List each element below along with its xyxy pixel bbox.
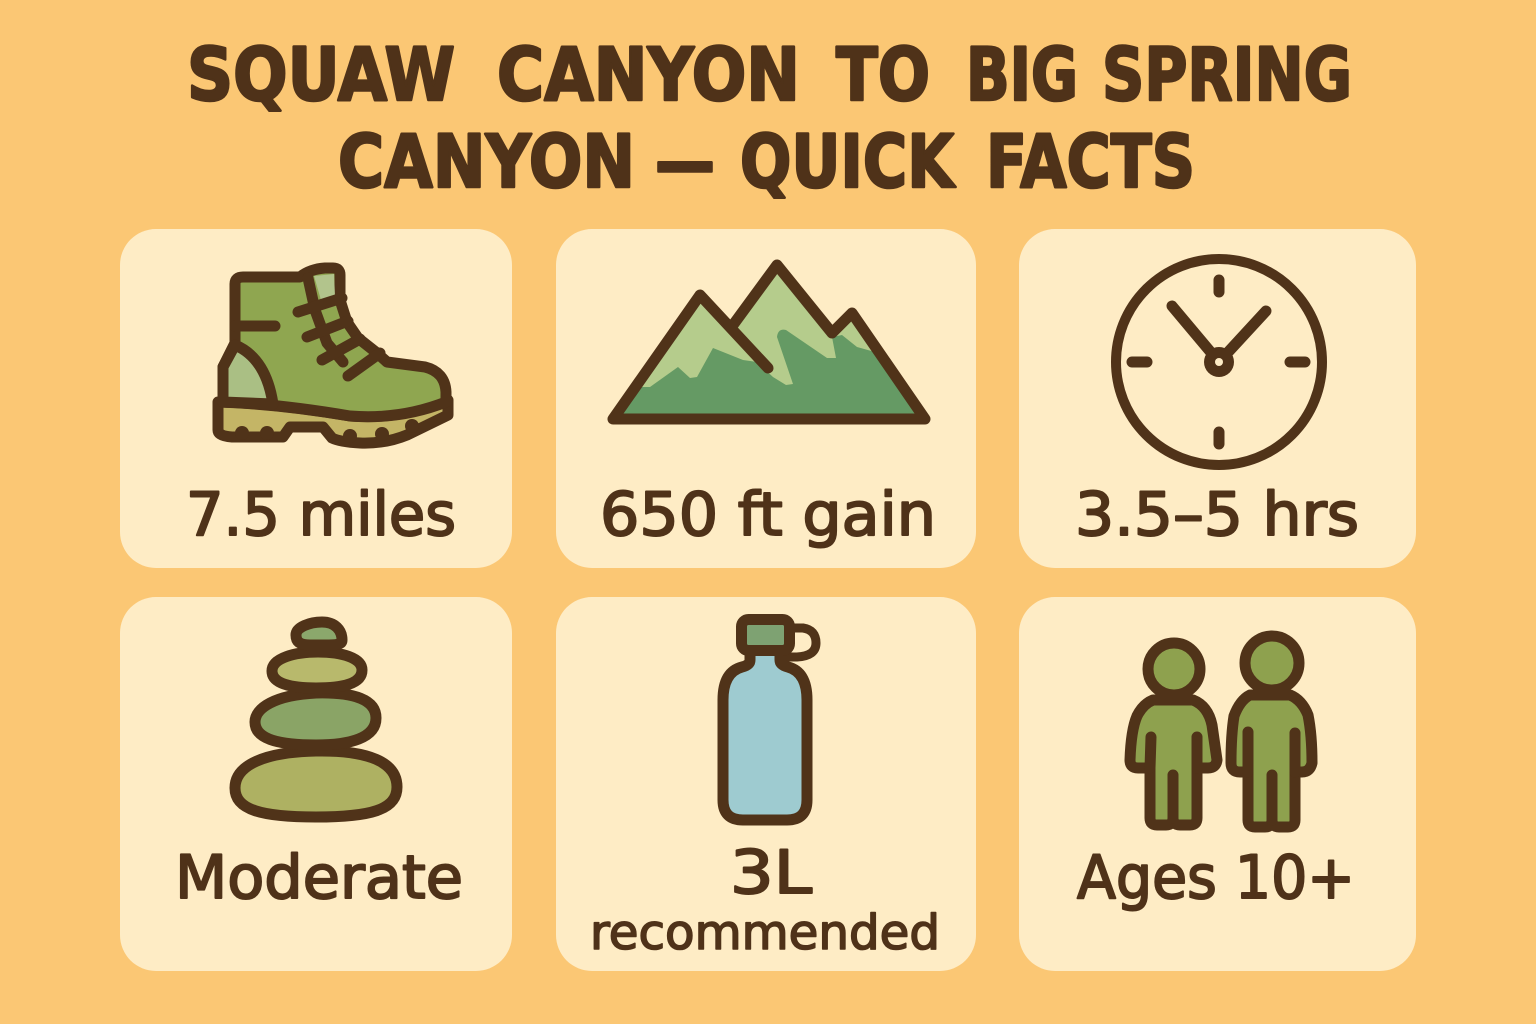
panel: distance xyxy=(120,229,512,568)
icon: two people xyxy=(1130,636,1312,827)
panel: duration xyxy=(1019,229,1416,568)
panel: ages xyxy=(1019,597,1416,971)
label: 7.5 miles: 7.5 miles xyxy=(186,480,456,550)
label: Moderate: Moderate xyxy=(175,843,463,913)
panel: difficulty xyxy=(120,597,512,971)
title: QUICK xyxy=(740,120,956,205)
title: TO xyxy=(836,33,930,118)
label: Ages 10+: Ages 10+ xyxy=(1077,843,1355,913)
icon: hiking boot xyxy=(218,268,448,443)
title: FACTS xyxy=(986,120,1195,205)
title: CANYON xyxy=(497,33,800,118)
title xyxy=(187,33,1352,205)
icon: rock cairn xyxy=(235,622,397,817)
icon: clock xyxy=(1116,259,1322,465)
label: 650 ft gain: 650 ft gain xyxy=(600,480,936,550)
title: — xyxy=(655,120,715,205)
label: 3.5–5 hrs: 3.5–5 hrs xyxy=(1075,480,1359,550)
label: 3L recommended xyxy=(590,838,940,961)
title: SPRING xyxy=(1102,33,1352,118)
label: 3L recommended: 3L xyxy=(730,838,813,908)
panel: water xyxy=(556,597,976,971)
icon: water bottle xyxy=(723,620,816,820)
title: CANYON xyxy=(338,120,635,205)
title: SQUAW xyxy=(187,33,455,118)
icon: mountains xyxy=(613,265,925,419)
panel: elevation gain xyxy=(556,229,976,568)
label: 3L recommended: recommended xyxy=(590,905,940,961)
title: BIG xyxy=(966,33,1078,118)
